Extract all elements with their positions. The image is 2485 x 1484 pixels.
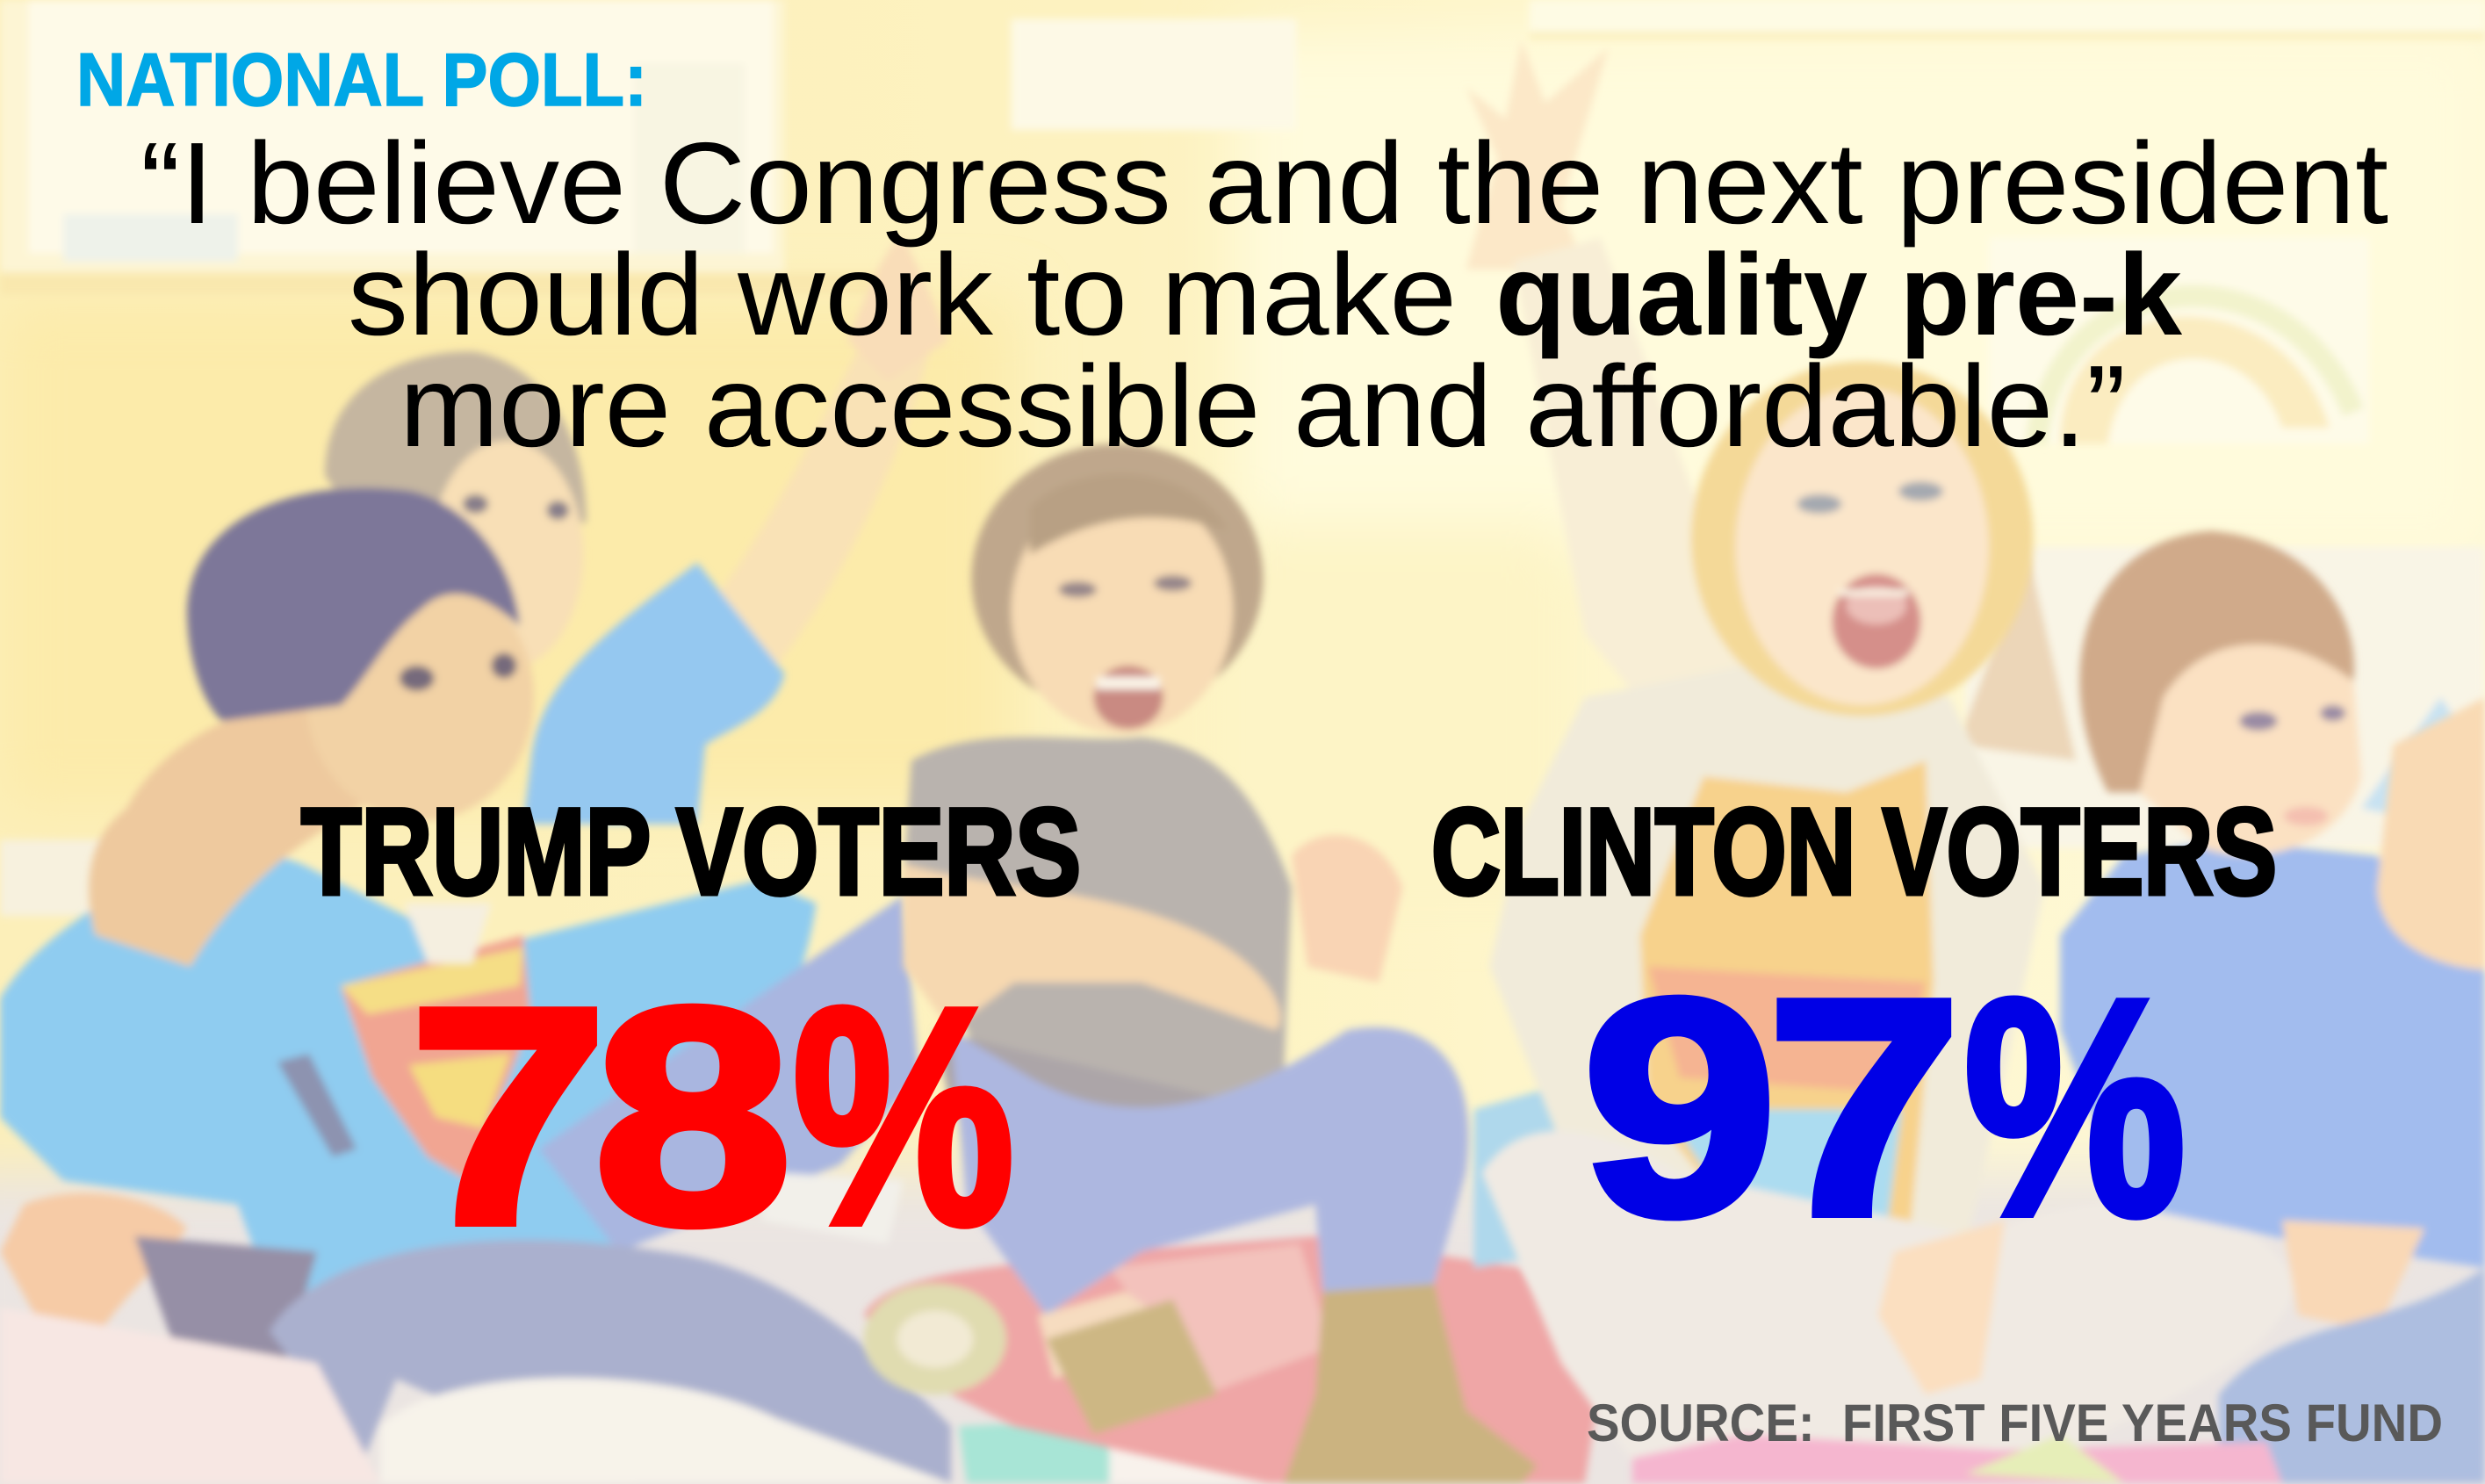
quote line 1: “I believe Congress and the next president [140,119,2388,248]
window frame top left [0,0,784,272]
floral blanket and white cloth [0,1308,380,1483]
raised arm right girl [1466,40,1609,270]
pillow [864,1236,1601,1483]
dark lap [134,1236,317,1363]
back boy [705,309,935,666]
middle girl [971,443,1263,713]
statistic: clinton voters 97%: % [1964,936,2186,1279]
statistic: trump voters 78%: 7 [409,945,608,1288]
quote line 2: quality pre-k [1495,230,2183,359]
heading: trump voters: TRUMP VOTERS [301,782,1081,920]
statistic: trump voters 78%: 8 [594,945,792,1288]
statistic: trump voters 78%: % [793,945,1014,1288]
wall art right [1965,547,2485,848]
quote line 3: more accessible and affordable.” [400,342,2126,471]
source note: SOURCE: FIRST FIVE YEARS FUND [1587,1394,2443,1452]
girl leg [951,1027,1469,1315]
quote line 2: should work to make [348,230,1457,359]
left boy [0,832,816,1292]
bench left [0,840,111,916]
quote text [140,119,2388,471]
boots [1046,1300,1217,1434]
shelf line top right [1530,0,2485,32]
jeans [270,1240,951,1483]
rainbow picture [1989,238,2369,443]
legs [1482,1131,2294,1483]
statistic: clinton voters 97% [1582,936,2186,1279]
hair [1691,361,2034,717]
right girl cardigan and dress [1490,666,2044,1252]
label: national poll: NATIONAL POLL: [76,39,647,122]
alphabet poster [1011,19,1296,130]
right boy [2060,840,2485,1268]
quote line 2 [348,230,2183,359]
statistic: trump voters 78% [409,945,1014,1288]
hand bottom left [0,1193,187,1339]
statistic: clinton voters 97%: 7 [1767,936,1962,1279]
statistic: clinton voters 97%: 9 [1582,936,1777,1279]
heading: clinton voters: CLINTON VOTERS [1431,782,2277,920]
superman logo [341,935,531,1181]
